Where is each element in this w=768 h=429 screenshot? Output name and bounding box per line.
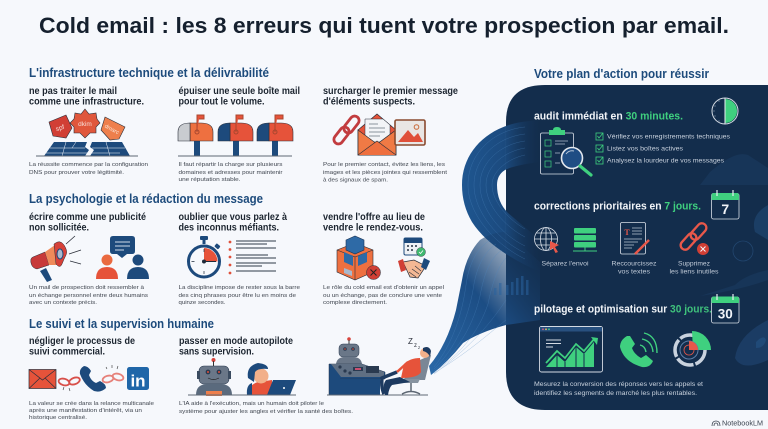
icon: three mailboxes xyxy=(178,115,293,156)
checklist: Listez vos boîtes actives xyxy=(607,146,683,152)
step: pilotage xyxy=(534,294,739,397)
subheading: épuiser une seule boîte mail xyxy=(178,86,300,97)
icon: calendar 7 xyxy=(712,190,739,219)
subheading: suivi commercial. xyxy=(29,346,105,358)
icon: calendar and handshake xyxy=(398,238,430,278)
subheading: pour tout le volume. xyxy=(178,96,265,108)
subheading: d'éléments suspects. xyxy=(323,96,415,108)
body text: La discipline impose de rester sous la barre xyxy=(178,285,300,291)
heading: psychologie: La psychologie et la rédaction du message xyxy=(29,192,263,206)
body text: Le rôle du cold email est d'obtenir un appel xyxy=(323,285,444,291)
step labels: vos textes xyxy=(618,270,650,276)
body text: des cinq phrases pour être lu en moins de xyxy=(178,293,296,299)
body text: quinze secondes. xyxy=(178,300,226,306)
icon: calendar 30: 30 xyxy=(718,306,733,322)
step title: corrections prioritaires en 7 jours. xyxy=(534,200,701,212)
checklist: Vérifiez vos enregistrements techniques xyxy=(607,134,730,140)
icon: two people with speech bubble xyxy=(96,236,149,279)
icon: document and pen: T xyxy=(624,228,630,237)
body text: historique centralisé. xyxy=(29,415,87,421)
step description xyxy=(534,381,703,397)
checklist: Analysez la lourdeur de vos messages xyxy=(607,158,724,164)
step labels xyxy=(542,262,718,276)
step title: pilotage et optimisation sur 30 jours. xyxy=(534,304,712,316)
body text xyxy=(323,285,444,306)
heading: suivi: Le suivi et la supervision humaine xyxy=(29,317,214,331)
subheading xyxy=(323,212,425,234)
body text: à des signaux de spam. xyxy=(323,178,388,184)
icon: chain envelope image xyxy=(332,114,425,155)
subheading xyxy=(29,336,135,358)
icon: spf dkim dmarc badges on cracked wall: dkim xyxy=(78,121,92,128)
card: passer en mode autopilote xyxy=(179,336,353,415)
subheading: surcharger le premier message xyxy=(323,86,458,97)
step description: Mesurez la conversion des réponses vers les appels et xyxy=(534,381,703,388)
subheading: non sollicitée. xyxy=(29,222,89,234)
subheading: comme une infrastructure. xyxy=(29,96,144,108)
step labels: Reccourcissez xyxy=(612,262,656,268)
icon: phone with signal xyxy=(620,333,657,367)
icon: server xyxy=(573,228,597,251)
icon: globe with cursor xyxy=(534,228,559,253)
section: infrastructure xyxy=(29,66,458,184)
card: vendre l'offre xyxy=(323,212,444,306)
icon: robot xyxy=(196,358,232,396)
section: plan d'action xyxy=(534,67,739,397)
heading: infrastructure: L'infrastructure technique et la délivrabilité xyxy=(29,66,269,80)
icon: half clock xyxy=(712,98,738,124)
icon: megaphone xyxy=(31,236,81,282)
body text: complexe directement. xyxy=(323,300,387,306)
body text: un échange personnel entre deux humains xyxy=(29,293,148,299)
body text: La réussite commence par la configuration xyxy=(29,162,148,168)
body text: système pour ajuster les angles et vérifier la santé des boîtes. xyxy=(179,409,353,415)
subheading xyxy=(29,212,146,234)
icon: person dozing on laptop xyxy=(247,363,296,395)
icon: spf dkim dmarc badges on cracked wall xyxy=(36,109,138,156)
icon: spf dkim dmarc badges on cracked wall: dmarc xyxy=(103,124,120,136)
body text: avec un contexte précis. xyxy=(29,300,97,306)
icon: segment donut xyxy=(675,331,711,365)
step: corrections prioritaires xyxy=(534,190,739,276)
NotebookLM watermark: NotebookLM xyxy=(722,418,763,428)
card: écrire comme une publicité xyxy=(29,212,149,306)
body text xyxy=(29,401,154,421)
illustration: robot at console and sleeping person xyxy=(327,337,431,396)
body text: images et les pièces jointes qui ressemblent xyxy=(323,170,447,176)
subheading xyxy=(178,212,287,234)
icon: calendar 7: 7 xyxy=(721,201,729,217)
step: audit immédiat xyxy=(534,98,738,175)
panel: plan d'action background xyxy=(506,85,768,410)
body text xyxy=(29,162,148,176)
subheading: négliger le processus de xyxy=(29,336,135,347)
body text: ou un échange, pas de conclure une vente xyxy=(323,293,442,299)
illustration: robot at console and sleeping person: Z xyxy=(408,337,413,346)
flowing ribbon graphic xyxy=(429,120,540,375)
subheading xyxy=(178,86,300,108)
icon: spf dkim dmarc badges on cracked wall: spf xyxy=(55,124,66,133)
section: psychologie xyxy=(29,192,444,306)
icon: broken link with cross xyxy=(679,221,709,255)
body text: une réputation stable. xyxy=(178,177,241,183)
icon: growth chart window xyxy=(540,326,602,372)
subheading: passer en mode autopilote xyxy=(179,336,293,347)
body text xyxy=(178,285,300,306)
subheading: vendre le rendez-vous. xyxy=(323,222,423,234)
step title: audit immédiat en 30 minutes. xyxy=(534,110,683,122)
body text: Pour le premier contact, évitez les liens, les xyxy=(323,162,445,168)
illustration: robot at console and sleeping person: z xyxy=(418,345,421,350)
step labels: Supprimez xyxy=(678,262,710,268)
step description: identifiez les segments de marché les plus rentables. xyxy=(534,390,697,397)
body text: DNS pour prouver votre légitimité. xyxy=(29,170,124,176)
body text: L'IA aide à l'exécution, mais un humain doit piloter le xyxy=(179,401,324,407)
subheading: ne pas traiter le mail xyxy=(29,86,117,97)
divider: ground line xyxy=(188,394,296,396)
illustration: robot at console and sleeping person: z xyxy=(414,343,417,349)
subheading: sans supervision. xyxy=(179,346,254,358)
card: ne pas traiter le mail xyxy=(29,86,148,176)
card: épuiser une seule boîte xyxy=(178,86,300,183)
body text xyxy=(178,162,283,183)
body text xyxy=(323,162,447,184)
step labels: Séparez l'envoi xyxy=(542,262,588,268)
subheading: oublier que vous parlez à xyxy=(178,212,287,223)
heading: plan d'action: Votre plan d'action pour réussir xyxy=(534,67,709,81)
body text: domaines et adresses pour maintenir xyxy=(178,170,283,176)
icon: stopwatch and text lines xyxy=(188,236,276,277)
step labels: les liens inutiles xyxy=(670,270,718,276)
body text xyxy=(29,285,148,306)
subheading: vendre l'offre au lieu de xyxy=(323,212,425,223)
subheading: des inconnus méfiants. xyxy=(178,222,279,234)
body text: Un mail de prospection doit ressembler à xyxy=(29,285,145,291)
subheading: écrire comme une publicité xyxy=(29,212,146,223)
card: oublier que vous parlez xyxy=(178,212,300,306)
body text: La valeur se crée dans la relance multicanale xyxy=(29,401,154,407)
body text: Il faut répartir la charge sur plusieurs xyxy=(178,162,283,168)
icon: calendar 30 xyxy=(712,294,739,323)
subheading xyxy=(29,86,144,108)
icon: document and pen xyxy=(620,222,649,254)
subheading xyxy=(179,336,293,358)
card: négliger le suivi xyxy=(29,336,154,421)
checklist xyxy=(596,133,730,164)
icon: email phone linkedin chain: in xyxy=(130,372,146,390)
section: suivi xyxy=(29,317,431,421)
icon: clipboard and magnifier xyxy=(540,127,591,175)
card: surcharger le premier message xyxy=(323,86,458,184)
subheading xyxy=(323,86,458,108)
icon: product box with cross xyxy=(337,236,380,280)
body text: après une manifestation d'intérêt, via un xyxy=(29,408,142,414)
title: Cold email : les 8 erreurs qui tuent votre prospection par email. xyxy=(39,13,729,38)
body text xyxy=(179,401,353,415)
